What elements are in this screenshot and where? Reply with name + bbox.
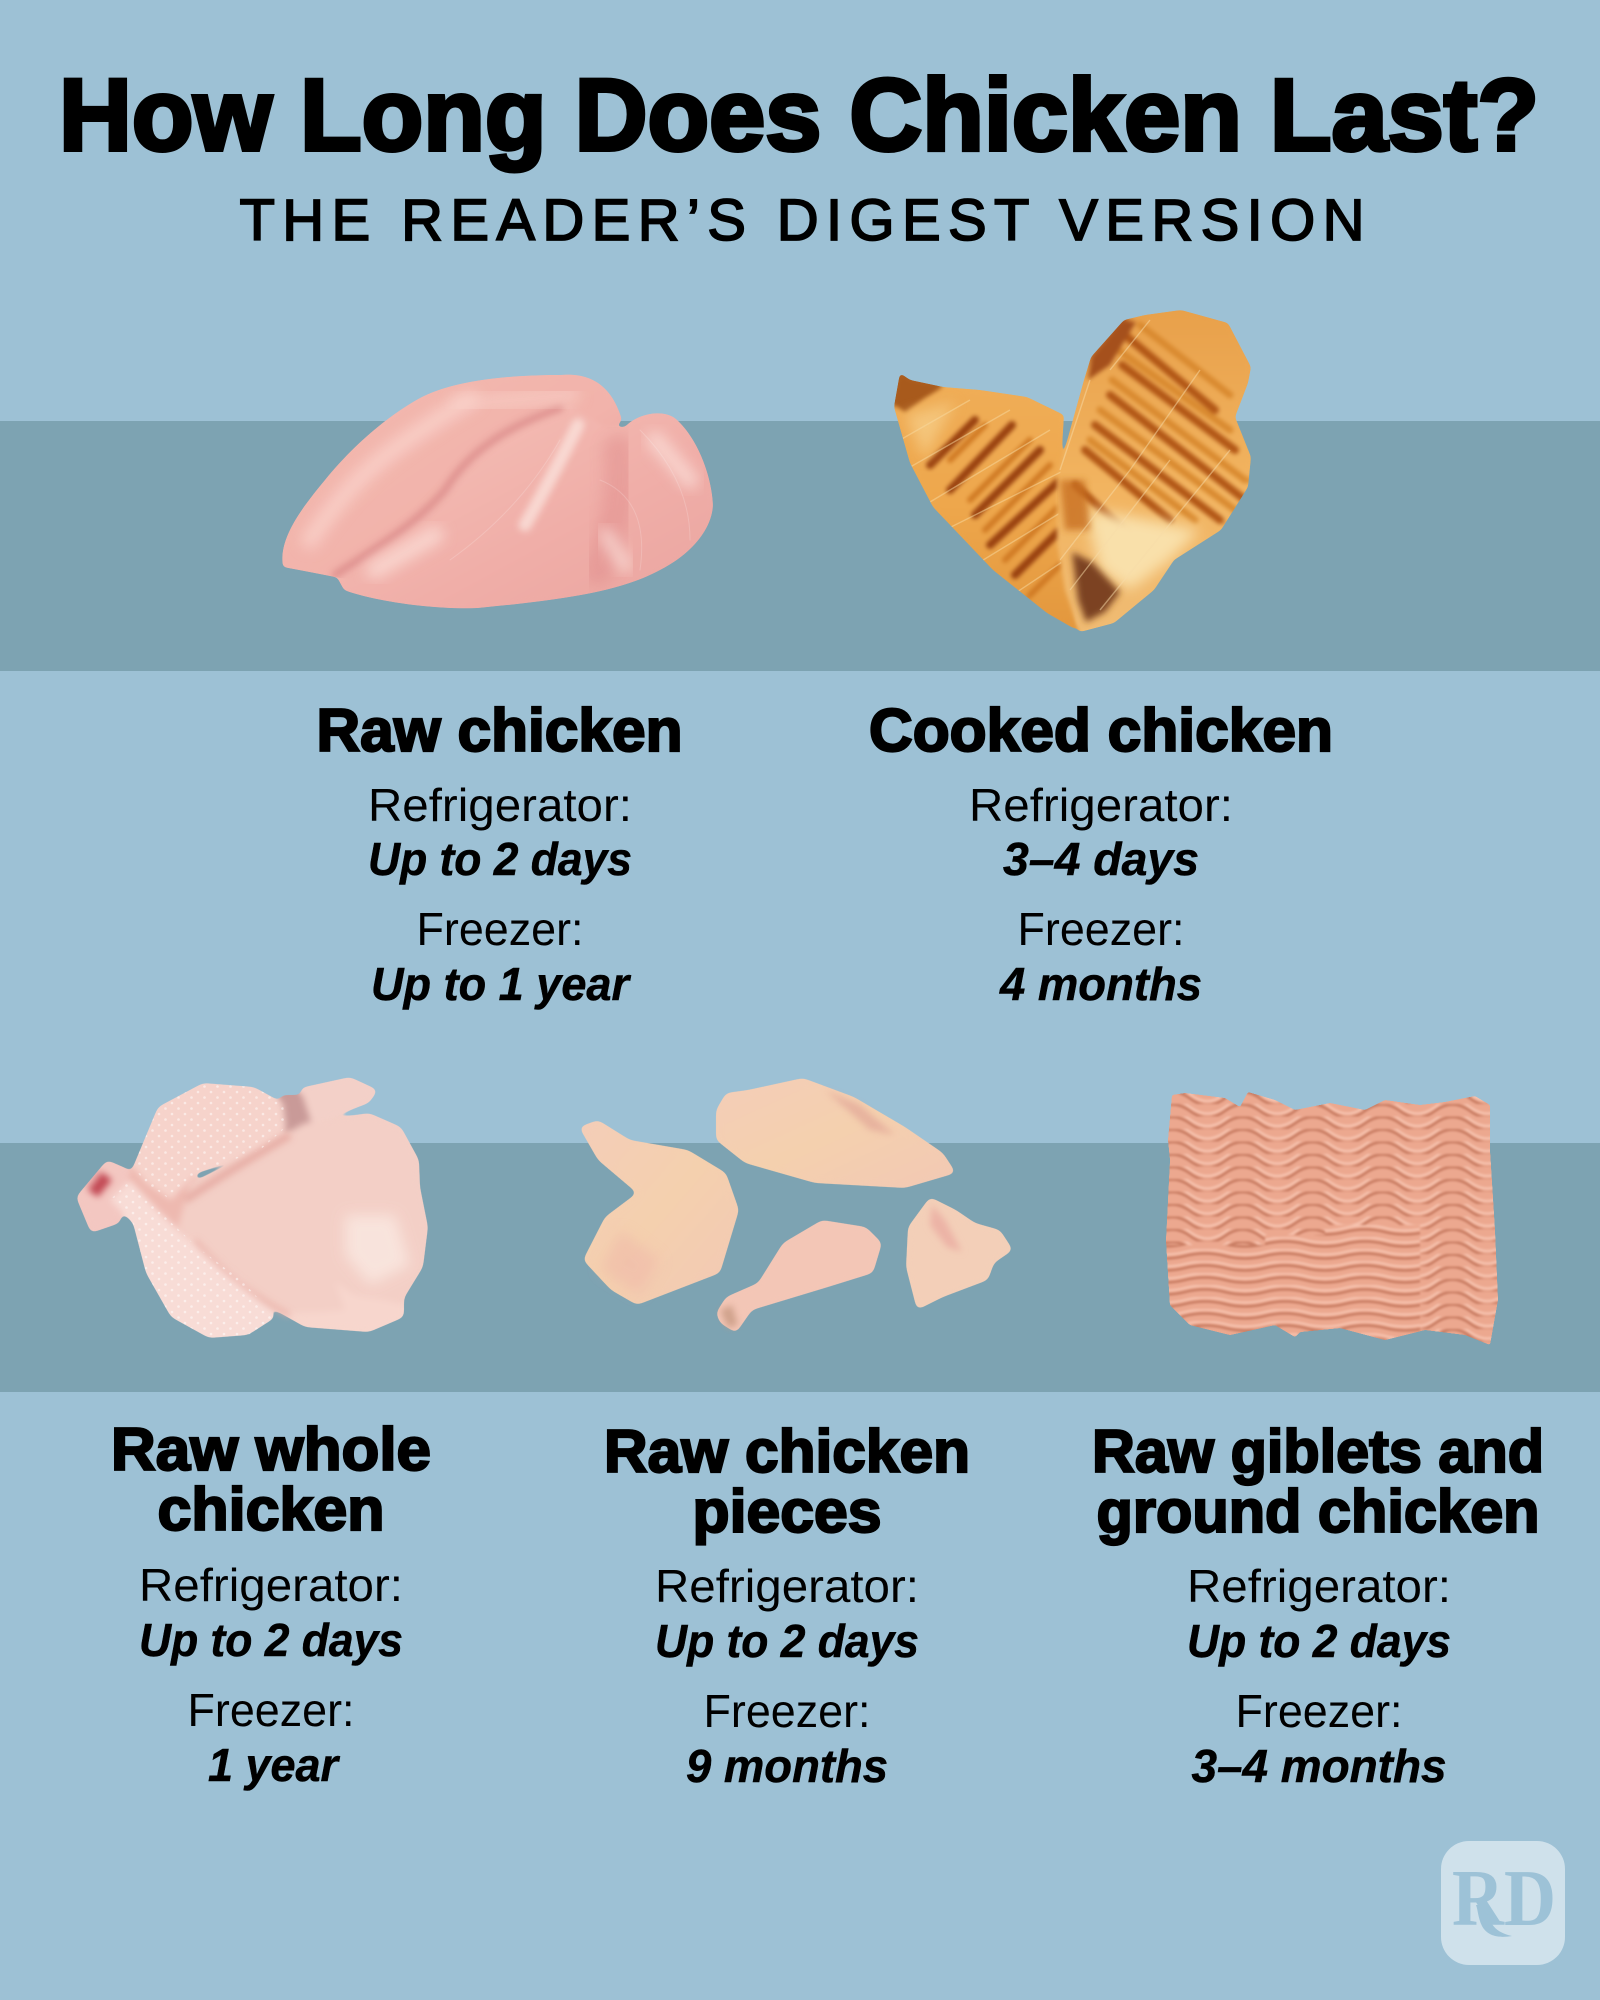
band: top image strip xyxy=(0,421,1600,671)
text block: raw chicken xyxy=(316,697,682,1010)
text block: raw giblets and ground chicken: 3–4 months xyxy=(1192,1740,1446,1792)
text block: cooked chicken: 3–4 days xyxy=(1003,833,1199,885)
text block: raw chicken pieces: Raw chicken xyxy=(604,1418,970,1485)
wing xyxy=(906,1197,1013,1310)
image: cooked grilled chicken xyxy=(890,305,1260,640)
title: How Long Does Chicken Last? xyxy=(59,58,1539,172)
text block: raw whole chicken: chicken xyxy=(158,1476,384,1543)
text block: raw giblets and ground chicken: Raw giblets and xyxy=(1092,1418,1544,1485)
text block: raw chicken: Up to 2 days xyxy=(368,833,632,885)
logo: RD xyxy=(1441,1841,1565,1965)
text block: raw giblets and ground chicken: Freezer: xyxy=(1236,1685,1402,1737)
text block: raw whole chicken: Freezer: xyxy=(188,1684,354,1736)
text block: raw chicken: Refrigerator: xyxy=(368,779,632,831)
text block: raw chicken pieces xyxy=(604,1418,970,1792)
drumstick xyxy=(716,1220,882,1333)
text block: raw chicken pieces: pieces xyxy=(692,1478,882,1545)
logo: RD: RD xyxy=(1452,1855,1556,1943)
text block: raw chicken: Up to 1 year xyxy=(371,958,631,1010)
text block: raw whole chicken: Refrigerator: xyxy=(139,1559,403,1611)
image: raw whole chicken xyxy=(76,1077,428,1340)
text block: raw chicken: Freezer: xyxy=(416,903,584,955)
text block: cooked chicken: Cooked chicken xyxy=(869,697,1333,764)
text block: raw chicken pieces: Freezer: xyxy=(704,1685,870,1737)
text block: raw whole chicken: Up to 2 days xyxy=(139,1614,403,1666)
text block: raw chicken pieces: Refrigerator: xyxy=(655,1560,919,1612)
text block: cooked chicken: Freezer: xyxy=(1018,903,1184,955)
text block: raw giblets and ground chicken xyxy=(1092,1418,1544,1792)
text block: raw chicken pieces: 9 months xyxy=(686,1740,888,1792)
text block: raw chicken pieces: Up to 2 days xyxy=(655,1615,919,1667)
text block: raw whole chicken: 1 year xyxy=(208,1739,340,1791)
text block: raw giblets and ground chicken: Up to 2 days xyxy=(1187,1615,1451,1667)
breast xyxy=(716,1078,956,1188)
subtitle: THE READER’S DIGEST VERSION xyxy=(240,188,1364,253)
text block: raw whole chicken xyxy=(111,1416,431,1791)
image: raw chicken pieces xyxy=(579,1078,1013,1333)
text block: cooked chicken: Refrigerator: xyxy=(969,779,1233,831)
text block: raw whole chicken: Raw whole xyxy=(111,1416,431,1483)
text block: raw giblets and ground chicken: Refrigerator: xyxy=(1187,1560,1451,1612)
text block: cooked chicken xyxy=(869,697,1333,1010)
text block: cooked chicken: 4 months xyxy=(999,958,1202,1010)
leg quarter xyxy=(579,1120,739,1305)
image: raw chicken breasts xyxy=(282,375,713,608)
band: bottom image strip xyxy=(0,1143,1600,1392)
text block: raw chicken: Raw chicken xyxy=(316,697,682,764)
text block: raw giblets and ground chicken: ground chicken xyxy=(1096,1478,1540,1545)
image: raw ground chicken xyxy=(1160,1085,1505,1350)
